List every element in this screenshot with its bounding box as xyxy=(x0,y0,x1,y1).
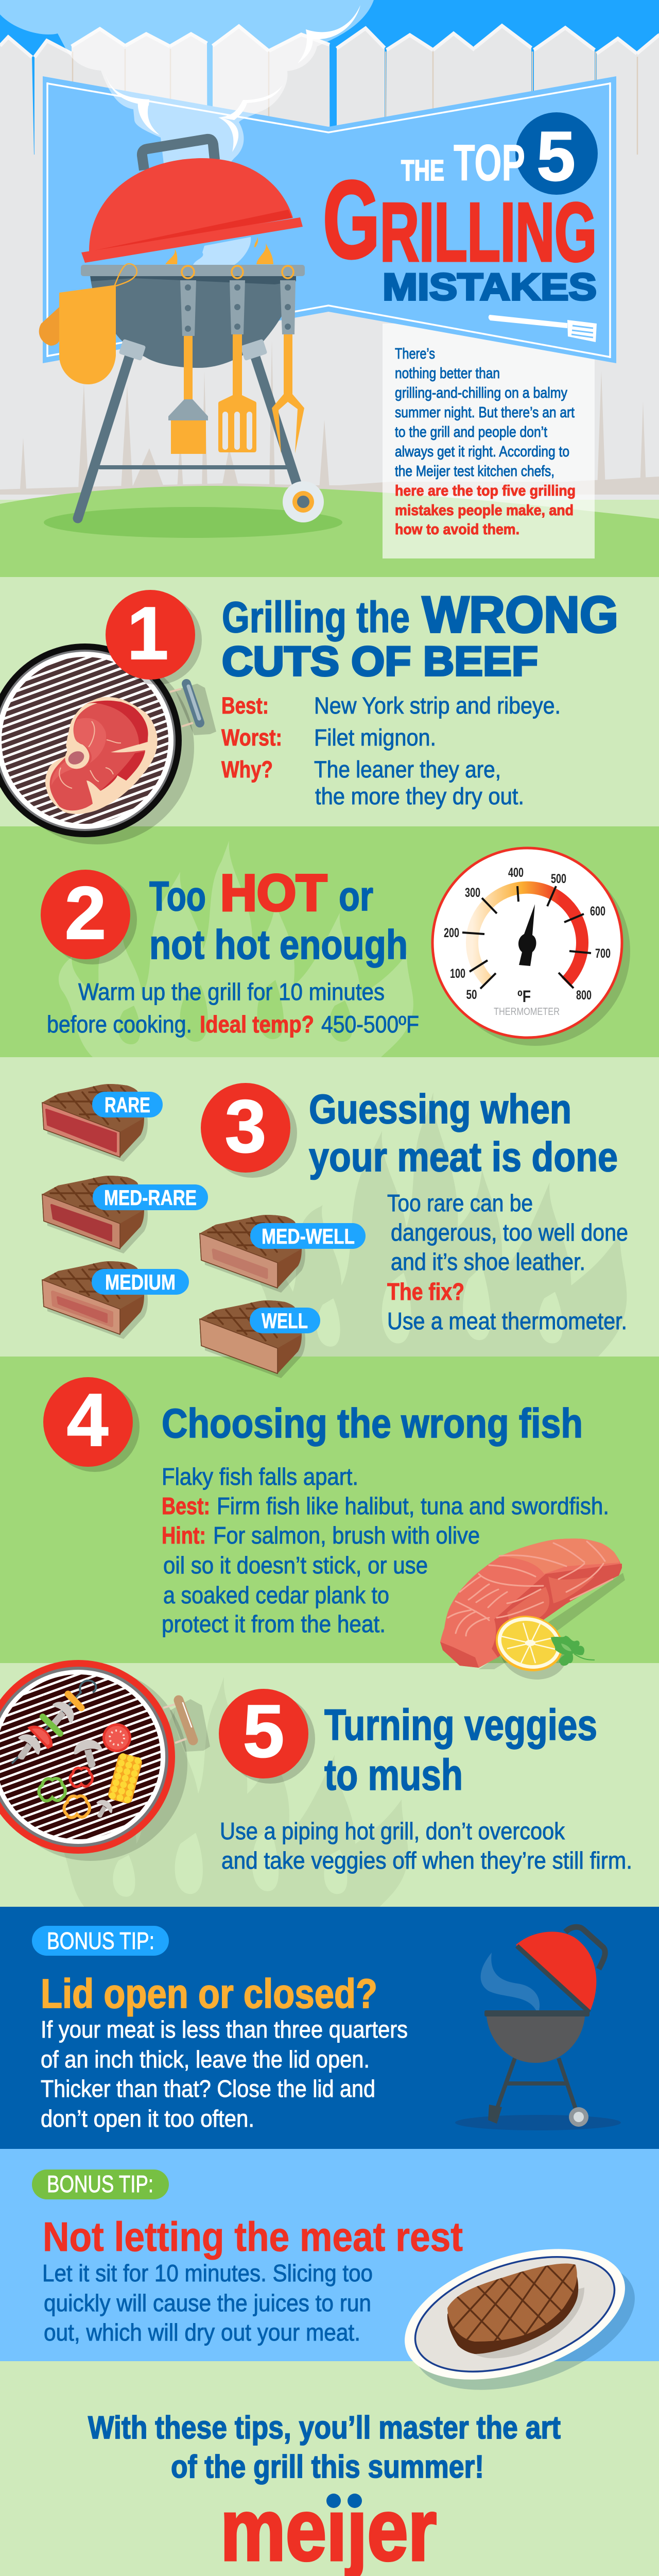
temperature labels: 500 xyxy=(551,872,566,886)
steak: medium: MEDIUM xyxy=(105,1270,176,1294)
corn xyxy=(107,1752,143,1805)
heading: Lid open or closed? xyxy=(41,1971,377,2016)
skewer xyxy=(8,1681,96,1767)
panel: bonus tip lid xyxy=(32,1926,621,2132)
illustration: kettle grill xyxy=(39,139,324,522)
tomato xyxy=(102,1723,131,1752)
text: lid advice: of an inch thick, leave the lid open. xyxy=(41,2046,370,2073)
text: the fix: The fix? xyxy=(387,1278,464,1305)
thermometer: THERMOMETER xyxy=(494,1006,560,1018)
text: best, worst, why: Best: xyxy=(221,692,269,719)
heading: or xyxy=(339,873,373,920)
panel: mistake 5 xyxy=(0,1660,632,1874)
text: the fix: Too rare can be xyxy=(387,1190,533,1216)
number badge: 4 xyxy=(67,1378,108,1462)
smoke cloud xyxy=(0,0,374,265)
text: rest advice xyxy=(42,2260,373,2346)
steak: medium rare: MED-RARE xyxy=(104,1185,197,1210)
grill wheel xyxy=(283,481,324,522)
intro text: There’s xyxy=(395,346,435,362)
text: rest advice: out, which will dry out your meat. xyxy=(44,2319,360,2346)
intro text: mistakes people make, and xyxy=(395,502,574,519)
steak: rare xyxy=(42,1084,163,1162)
text: rest advice: Let it sit for 10 minutes. Slicing too xyxy=(42,2260,373,2286)
panel: bonus tip rest xyxy=(32,2170,463,2346)
number badge xyxy=(41,870,137,964)
text: warm up: before cooking. xyxy=(47,1011,192,1038)
steak: medium rare xyxy=(42,1176,208,1253)
text: fish advice: Hint: xyxy=(162,1522,206,1549)
icon: spatula xyxy=(489,315,597,342)
heading: WRONG xyxy=(422,586,618,643)
intro text: grilling-and-chilling on a balmy xyxy=(395,385,567,401)
steak: well xyxy=(200,1300,320,1378)
icon: open grill xyxy=(455,1927,621,2130)
closing message: With these tips, you’ll master the art xyxy=(88,2410,561,2446)
lemon slice xyxy=(490,1608,573,1687)
heading: Turning veggies xyxy=(324,1701,597,1749)
number badge xyxy=(201,1083,297,1178)
panel: mistake 4 xyxy=(43,1377,625,1687)
title: MISTAKES xyxy=(383,266,597,308)
grill lid xyxy=(81,158,303,263)
heading: Too xyxy=(149,873,206,920)
temperature labels: 400 xyxy=(508,866,524,880)
text: the fix xyxy=(387,1190,628,1334)
text: veggie advice: Use a piping hot grill, don’t overcook xyxy=(220,1818,565,1844)
bonus pill: BONUS TIP: xyxy=(47,2171,153,2197)
heading: Choosing the wrong fish xyxy=(162,1400,583,1446)
thermometer: ºF xyxy=(517,987,531,1006)
intro text xyxy=(395,346,576,538)
text: warm up: 450-500ºF xyxy=(321,1011,419,1038)
pepper rings xyxy=(39,1768,92,1818)
panel: mistake 1 xyxy=(0,586,618,844)
oven mitt xyxy=(39,264,137,384)
text: best, worst, why: New York strip and ribeye. xyxy=(314,692,561,719)
steam wisps xyxy=(105,5,360,152)
text: fish advice: oil so it doesn’t stick, or use xyxy=(163,1552,428,1579)
title: G xyxy=(323,158,380,281)
heading xyxy=(309,1086,618,1180)
text: best, worst, why: Why? xyxy=(221,756,273,783)
text: fish advice: Firm fish like halibut, tuna and swordfish. xyxy=(217,1493,609,1519)
text: best, worst, why xyxy=(221,692,561,809)
heading: Not letting the meat rest xyxy=(43,2214,463,2260)
number badge xyxy=(106,590,202,685)
number badge: 2 xyxy=(65,871,106,955)
steak: well: WELL xyxy=(262,1309,308,1333)
text: fish advice: protect it from the heat. xyxy=(162,1611,386,1637)
temperature labels xyxy=(444,866,611,1003)
steak: medium well: MED-WELL xyxy=(262,1224,355,1248)
text: warm up: Warm up the grill for 10 minutes xyxy=(78,978,385,1005)
text: best, worst, why: the more they dry out. xyxy=(315,783,524,809)
heading xyxy=(222,586,618,685)
text: the fix: Use a meat thermometer. xyxy=(387,1308,627,1334)
text: fish advice: a soaked cedar plank to xyxy=(163,1582,389,1608)
text: veggie advice: and take veggies off when they’re still firm. xyxy=(221,1847,632,1874)
grill legs xyxy=(78,357,299,518)
illustration: grill with vegetables xyxy=(0,1660,210,1861)
temperature labels: 200 xyxy=(444,926,459,940)
number badge: 3 xyxy=(225,1084,266,1168)
text: best, worst, why: Filet mignon. xyxy=(314,724,436,751)
intro text: how to avoid them. xyxy=(395,521,519,538)
text: best, worst, why: The leaner they are, xyxy=(314,756,501,783)
panel: footer xyxy=(88,2410,561,2576)
text: the fix: dangerous, too well done xyxy=(391,1219,628,1246)
text panel background xyxy=(383,324,595,558)
heading xyxy=(149,864,408,968)
thermometer xyxy=(432,848,630,1046)
text: veggie advice xyxy=(220,1818,632,1874)
heading: CUTS OF BEEF xyxy=(222,638,538,685)
text: lid advice: Thicker than that? Close the lid and xyxy=(41,2075,375,2102)
heading: HOT xyxy=(220,864,327,921)
temperature labels: 600 xyxy=(590,904,605,919)
text: lid advice xyxy=(41,2016,408,2132)
text: lid advice: If your meat is less than three quarters xyxy=(41,2016,408,2043)
heading: to mush xyxy=(324,1751,463,1799)
intro text: to the grill and people don’t xyxy=(395,424,547,440)
text: fish advice: Best: xyxy=(162,1493,210,1519)
lid handle xyxy=(142,139,215,170)
heading: your meat is done xyxy=(309,1134,618,1180)
illustration: plate with steak xyxy=(405,2249,635,2390)
grass xyxy=(0,486,659,577)
fence xyxy=(0,24,659,500)
panel: hero xyxy=(0,0,659,577)
steak xyxy=(45,697,158,814)
steak: medium well xyxy=(200,1215,366,1293)
ground shadow xyxy=(44,507,342,538)
text: warm up: Ideal temp? xyxy=(200,1011,314,1038)
needle xyxy=(518,904,536,966)
number badge: 5 xyxy=(243,1689,284,1773)
number badge xyxy=(43,1377,140,1472)
number badge: 1 xyxy=(127,591,168,675)
illustration: grill with steak xyxy=(0,643,216,844)
heading: Guessing when xyxy=(309,1086,571,1132)
panel: mistake 3 xyxy=(42,1083,628,1339)
text: fish advice: Flaky fish falls apart. xyxy=(162,1463,358,1490)
illustration: salmon with lemon xyxy=(440,1538,625,1687)
text: fish advice xyxy=(162,1463,609,1637)
sky xyxy=(0,0,659,165)
text: best, worst, why: Worst: xyxy=(221,724,282,751)
temperature labels: 50 xyxy=(466,988,477,1002)
text: rest advice: quickly will cause the juices to run xyxy=(44,2290,371,2316)
closing message xyxy=(88,2410,561,2485)
intro text: here are the top five grilling xyxy=(395,483,576,499)
closing message: of the grill this summer! xyxy=(171,2449,484,2485)
heading xyxy=(324,1701,597,1799)
panel: mistake 2 xyxy=(41,848,630,1046)
temperature labels: 100 xyxy=(450,967,465,981)
intro text: always get it right. According to xyxy=(395,444,569,460)
text: the fix: and it’s shoe leather. xyxy=(391,1248,585,1275)
heading: Grilling the xyxy=(222,593,410,641)
temperature labels: 700 xyxy=(595,946,611,961)
bonus pill: BONUS TIP: xyxy=(47,1927,154,1954)
intro text: the Meijer test kitchen chefs, xyxy=(395,463,554,480)
mushrooms xyxy=(72,1738,116,1822)
steak: rare: RARE xyxy=(105,1093,150,1117)
text: fish advice: For salmon, brush with olive xyxy=(213,1522,480,1549)
parsley xyxy=(551,1636,595,1666)
heading: not hot enough xyxy=(149,922,408,968)
title xyxy=(323,112,598,308)
temperature labels: 300 xyxy=(465,886,480,900)
title: 5 xyxy=(536,117,576,195)
temperature labels: 800 xyxy=(576,988,592,1003)
banner xyxy=(43,76,616,363)
number badge xyxy=(219,1689,315,1784)
intro text: summer night. But there’s an art xyxy=(395,404,575,421)
title: TOP xyxy=(454,134,525,191)
utensils xyxy=(168,266,304,454)
steak: medium xyxy=(42,1261,189,1339)
title: THE xyxy=(401,154,444,187)
flames xyxy=(165,237,273,264)
intro text: nothing better than xyxy=(395,365,500,382)
grill bowl xyxy=(81,265,305,368)
text: warm up xyxy=(47,978,419,1038)
text: lid advice: don’t open it too often. xyxy=(41,2105,254,2132)
